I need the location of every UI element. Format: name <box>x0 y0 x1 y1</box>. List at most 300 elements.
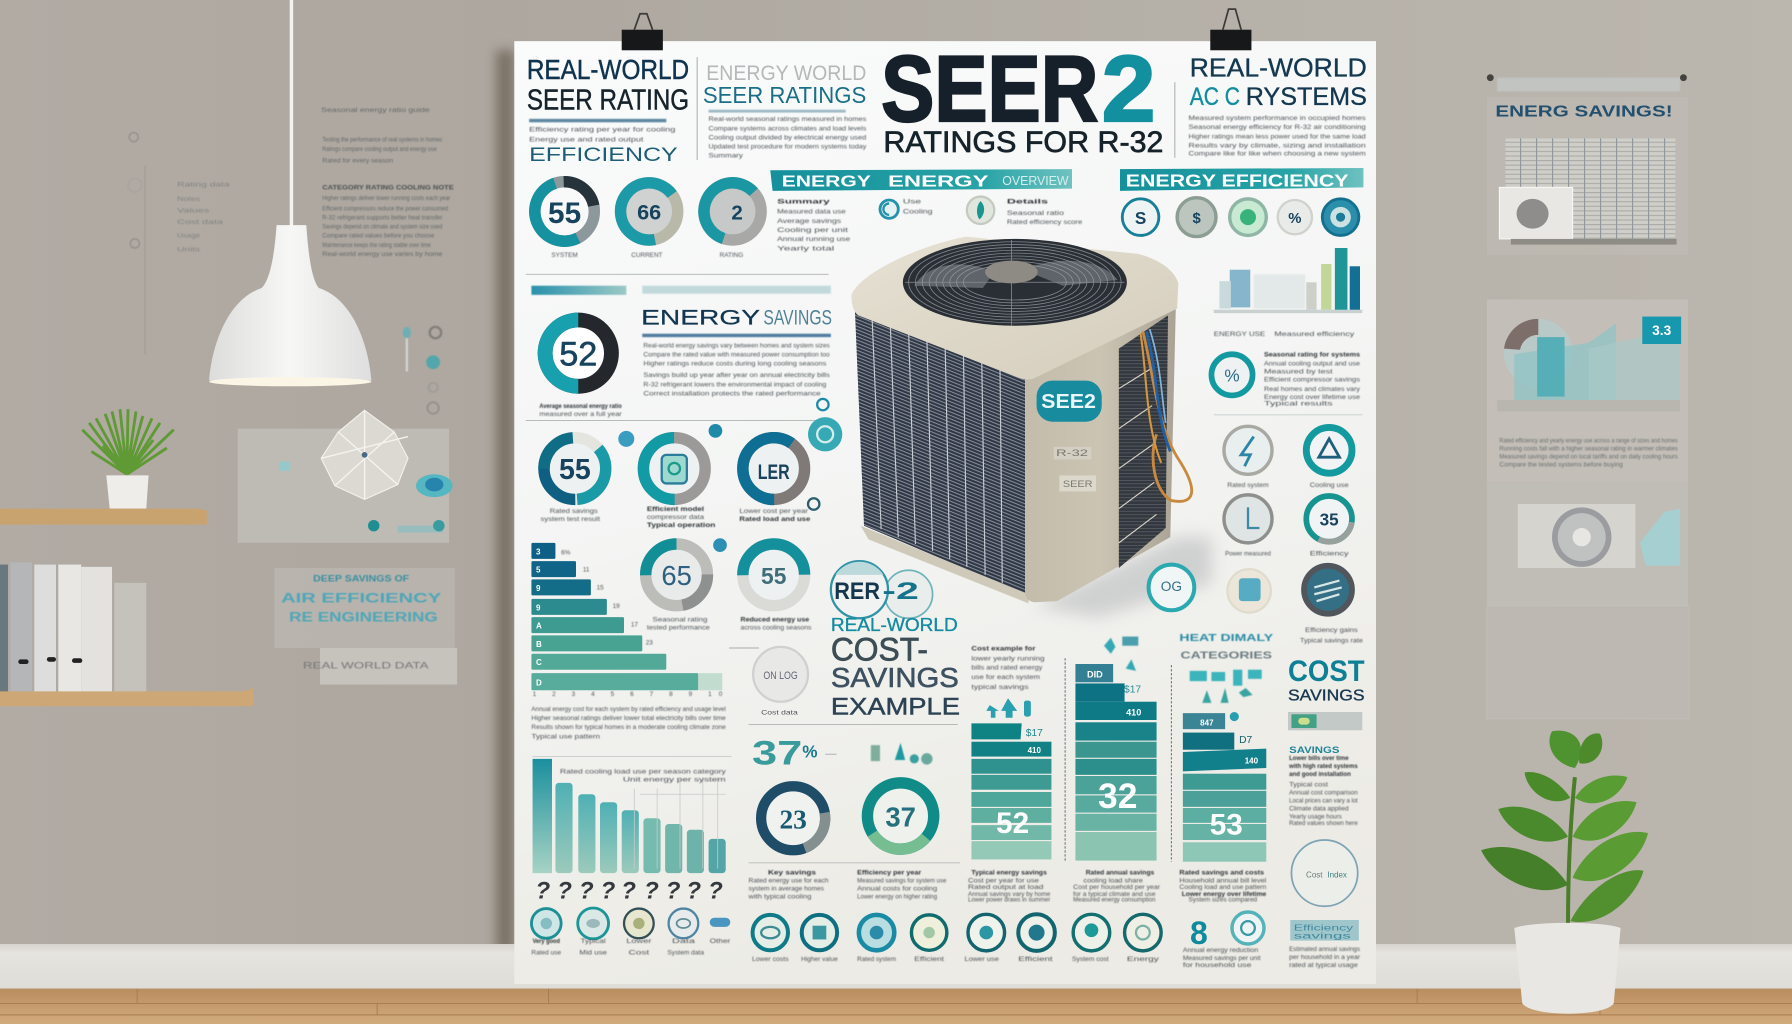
cost savings sidebar: COST <box>1288 655 1365 688</box>
ring row 3 <box>646 538 811 716</box>
horizontal bar chart: C <box>536 658 542 667</box>
left ghost text panel on wall: Higher ratings deliver lower running costs each year <box>322 195 451 202</box>
header column: SEER ratings: Compare systems across climates and load levels <box>709 125 866 132</box>
ring 23: 23 <box>779 805 807 835</box>
header column: SEER ratings <box>703 60 867 160</box>
question mark row: ? <box>536 877 551 904</box>
left ghost text panel on wall: Maintenance keeps the rating stable over time <box>322 242 431 249</box>
header column: real-world SEER rating: SEER RATING <box>527 85 689 117</box>
text under stacks: Lower energy over lifetime <box>1182 891 1267 898</box>
horizontal bar chart: 9 <box>536 584 541 593</box>
ghost panel: energy efficiency text: AIR EFFICIENCY <box>281 590 441 605</box>
cost savings sidebar <box>1288 655 1365 969</box>
text block <box>1214 331 1361 408</box>
icon captions: for household use <box>1183 962 1252 969</box>
energy savings section <box>526 274 832 421</box>
left ghost text panel on wall: Savings depend on climate and system size used <box>322 224 443 231</box>
ring teal percent <box>1211 354 1253 395</box>
left ghost text panel on wall: Testing the performance of real systems in homes <box>322 137 442 144</box>
icon captions: Efficient <box>914 956 944 963</box>
grey seal: Cost data <box>761 709 798 716</box>
caption columns: Lower energy on higher rating <box>857 893 938 900</box>
teal icons <box>1190 670 1262 703</box>
panel: wall charts: Measured savings depend on local tariffs and on daily cooling hours <box>1499 453 1678 460</box>
stacked bar column 1: $17 <box>1026 728 1043 739</box>
text under stacks: System sizes compared <box>1189 897 1258 904</box>
icon row bottom left: Lower <box>626 938 653 945</box>
left ghost text panel on wall: CATEGORY RATING COOLING NOTE <box>322 185 455 192</box>
question mark row: ? <box>708 877 723 904</box>
icon row bottom left: System data <box>667 949 704 956</box>
R-32 badge: -2 <box>882 578 919 605</box>
stacked bar column 3 <box>1183 712 1266 862</box>
stacked bar column 2 <box>1075 664 1157 861</box>
horizontal bar chart <box>531 543 726 740</box>
icon: leaf ring <box>967 197 994 224</box>
ring 55 teal: 55 <box>761 563 787 589</box>
icon row top right: % <box>1288 211 1301 227</box>
fan guard <box>903 239 1127 326</box>
horizontal bar chart: 19 <box>613 603 620 610</box>
savings paragraph: Savings build up year after year on annual electricity bills <box>643 372 830 379</box>
captions: Power measured <box>1225 550 1271 557</box>
faint far-left notes and rule <box>128 133 230 354</box>
horizontal bar chart: 17 <box>631 621 638 628</box>
captions: Reduced energy use <box>741 617 810 624</box>
ring 65 <box>646 544 707 606</box>
caption columns: Key savings <box>768 869 817 876</box>
binder clips <box>622 9 1251 50</box>
ghost icons beside lamp <box>403 327 441 414</box>
caption: measured over a full year <box>539 411 623 418</box>
upper shelf <box>0 509 207 525</box>
header column: real-world AC systems: REAL-WORLD <box>1190 53 1367 83</box>
blue tag <box>1290 920 1359 941</box>
icon captions: Lower costs <box>752 956 789 963</box>
ring 55 <box>531 425 618 512</box>
icon captions: Annual energy reduction <box>1183 947 1259 954</box>
ring 37: 37 <box>885 801 916 832</box>
ring captions: RATING <box>720 252 743 259</box>
text under stacks: Lower power draws in summer <box>968 897 1051 904</box>
text under stacks: Household annual bill level <box>1179 877 1266 884</box>
cost savings sidebar: Yearly usage hours <box>1289 813 1342 820</box>
icon captions: Rated system <box>857 956 896 963</box>
teal banner energy: OVERVIEW <box>1002 174 1069 188</box>
captions: Typical savings rate <box>1300 637 1363 644</box>
caption columns: with typical cooling <box>747 893 812 900</box>
caption <box>539 403 623 418</box>
captions: Typical operation <box>647 522 716 529</box>
text under stacks: Rated output at load <box>968 884 1044 891</box>
text under stacks: Cost per year for use <box>968 877 1039 884</box>
stacked bar column 1 header: lower yearly running <box>971 656 1045 663</box>
stacked bar column 2: $17 <box>1124 685 1141 696</box>
icon row top right: S <box>1135 208 1146 228</box>
faint far-left notes and rule: Rating data <box>177 181 230 188</box>
header column: SEER ratings: ENERGY WORLD <box>706 60 866 85</box>
text block: Annual cooling output and use <box>1264 361 1360 368</box>
mid banner notes and icons: Summary <box>777 198 830 205</box>
text under stacks: Annual savings vary by home <box>968 891 1051 898</box>
teal banner energy efficiency <box>1120 168 1363 191</box>
ring captions <box>551 252 743 259</box>
small building chart <box>1214 248 1362 313</box>
header column: real-world AC systems: Compare like for like when choosing a new system <box>1189 150 1366 157</box>
grille bars <box>872 315 1002 583</box>
header column: real-world SEER rating: REAL-WORLD <box>527 54 689 85</box>
panel: wall charts: Compare the tested systems before buying <box>1499 461 1623 468</box>
tag strip <box>531 286 626 295</box>
horizontal bar chart: 6% <box>561 549 571 556</box>
pale seal: Cost <box>1306 871 1323 880</box>
cost savings sidebar: Estimated annual savings <box>1289 946 1360 953</box>
header column: real-world AC systems: RYSTEMS <box>1246 83 1367 111</box>
header column: real-world AC systems: AC C <box>1190 83 1240 111</box>
ring teal percent: % <box>1224 366 1240 386</box>
ring icon <box>643 438 705 499</box>
horizontal bar chart: Higher seasonal ratings deliver lower total electricity bills over time <box>531 715 726 722</box>
icon row bottom left: Very good <box>533 938 560 945</box>
blue tag: savings <box>1294 931 1351 940</box>
header column: real-world SEER rating: Efficiency rating per year for cooling <box>529 126 676 133</box>
horizontal bar chart: 1 2 3 4 5 6 7 8 9 10 <box>533 691 723 698</box>
teal banner energy efficiency: ENERGY EFFICIENCY <box>1126 170 1349 190</box>
caption: Average seasonal energy ratio <box>539 403 622 410</box>
faint far-left notes and rule: Notes <box>177 196 200 203</box>
text block: Measured efficiency <box>1274 331 1355 338</box>
caption columns: Efficiency per year <box>857 869 922 876</box>
teal banner energy: ENERGY <box>888 173 989 190</box>
icon captions: Measured savings per unit <box>1183 955 1261 962</box>
dashed separators <box>1065 658 1171 862</box>
cost savings heading <box>831 614 960 720</box>
horizontal bar chart: Typical use pattern <box>531 733 601 740</box>
text under stacks: Rated annual savings <box>1086 869 1155 876</box>
header column: SEER ratings: SEER RATINGS <box>703 82 866 108</box>
vertical bar chart: Rated cooling load use per season category <box>560 769 727 776</box>
cost savings sidebar: and good installation <box>1289 771 1351 778</box>
percent block <box>747 725 960 963</box>
wooden floor <box>0 989 1792 1024</box>
text under stacks: for a typical climate and use <box>1073 891 1156 898</box>
ring LER: LER <box>758 459 790 484</box>
caption columns: system in average homes <box>749 885 824 892</box>
text block: Seasonal rating for systems <box>1264 352 1360 359</box>
stacked bar column 3 header: CATEGORIES <box>1181 650 1272 661</box>
faint far-left notes and rule: Usage <box>177 233 201 240</box>
stacked bar column 1 header: use for each system <box>971 674 1040 681</box>
caption columns <box>747 869 947 900</box>
title: RATINGS FOR R-32 <box>883 126 1163 159</box>
stacked bar column 2: 32 <box>1098 776 1137 816</box>
floor shadow on poster <box>1034 537 1211 617</box>
ring 37 <box>854 769 947 863</box>
wires <box>1141 329 1192 501</box>
left ghost text panel on wall: Real-world energy use varies by home <box>322 251 443 258</box>
text under stacks: Cost per household per year <box>1073 884 1161 891</box>
right side rating column: 35 <box>1320 510 1339 530</box>
text under stacks: Cooling load and use pattern <box>1179 884 1267 891</box>
captions: system test result <box>541 516 600 523</box>
captions: Efficient model <box>647 506 704 513</box>
header column: real-world AC systems: Measured system performance in occupied homes <box>1189 115 1366 122</box>
percent block: 37 <box>752 735 802 773</box>
question mark row: ? <box>579 877 594 904</box>
ghost panel with umbrella diagram <box>238 410 453 543</box>
side labels: R-32 <box>1056 448 1088 458</box>
ring 52: 52 <box>559 336 597 374</box>
pale seal: Index <box>1327 871 1347 880</box>
lower shelf <box>0 688 254 706</box>
left ghost text panel on wall: Rated for every season <box>322 157 394 164</box>
savings paragraph: Real-world energy savings vary between homes and system sizes <box>643 342 830 349</box>
baseboard <box>0 944 1792 990</box>
cost savings sidebar: SAVINGS <box>1288 688 1365 705</box>
left ghost text panel on wall: Efficient compressors reduce the power consumed <box>322 205 448 212</box>
teal house icons <box>1104 637 1138 671</box>
cost savings sidebar: rated at typical usage <box>1289 962 1358 969</box>
header column: real-world SEER rating <box>527 54 689 166</box>
side grille <box>1119 315 1168 568</box>
savings paragraph <box>643 342 830 397</box>
grey seal <box>729 647 808 716</box>
captions: Rated load and use <box>739 516 811 523</box>
small icons <box>618 399 842 510</box>
pale seal <box>1291 840 1358 906</box>
icon row bottom left: Data <box>672 938 696 945</box>
ghost panel: energy efficiency text: DEEP SAVINGS OF <box>313 574 410 584</box>
ring 2: 2 <box>731 201 743 224</box>
icon row <box>753 915 947 950</box>
title: SEER <box>881 36 1098 141</box>
question mark row: ? <box>644 877 659 904</box>
mid banner notes and icons: Cooling per unit <box>777 227 848 234</box>
ring 55: 55 <box>548 197 581 230</box>
text under stacks: cooling load share <box>1083 877 1143 884</box>
stacked bar column 1 header: Cost example for <box>971 645 1036 652</box>
icon row under stacks: 8 <box>1190 915 1208 951</box>
ring 55: 55 <box>559 454 591 486</box>
icon row bottom left: Typical <box>581 938 606 945</box>
icon captions: Energy <box>1127 956 1160 963</box>
percent block: % <box>802 742 818 762</box>
left ghost text panel on wall <box>321 107 455 258</box>
left ghost text panel on wall: Ratings compare cooling output and energy use <box>322 146 437 153</box>
captions <box>541 506 811 529</box>
horizontal bar chart: A <box>536 622 542 631</box>
faint far-left notes and rule: Cost data <box>177 219 224 226</box>
question mark row: ? <box>686 877 701 904</box>
stacked bar column 1: 52 <box>996 807 1029 840</box>
ring captions: SYSTEM <box>551 252 578 259</box>
icon captions <box>752 956 944 963</box>
cost savings heading: SAVINGS <box>831 662 959 693</box>
R-32 badge <box>831 561 933 618</box>
ghost panel: energy efficiency text <box>274 568 457 685</box>
text under stacks <box>968 869 1267 904</box>
stacked bar column 3 header: HEAT DIMALY <box>1179 633 1274 644</box>
heading energy savings: ENERGY <box>641 305 760 330</box>
captions: Efficiency <box>1310 550 1350 557</box>
ring 2 <box>696 175 769 248</box>
savings paragraph: Compare the rated value with measured power consumption too <box>643 352 830 359</box>
icon row top right: $ <box>1192 211 1201 227</box>
ghost panel: energy efficiency text: REAL WORLD DATA <box>303 661 430 671</box>
captions <box>647 617 811 632</box>
right face <box>1025 299 1176 602</box>
stacked bar column 1: 410 <box>1028 746 1042 755</box>
ring LER <box>743 438 805 499</box>
icon rings <box>1224 426 1272 474</box>
horizontal bar chart: Results shown for typical homes in a moderate cooling climate zone <box>531 724 726 731</box>
captions: Lower cost per year <box>739 508 809 515</box>
icon row top right <box>1122 198 1359 237</box>
captions: compressor data <box>647 514 705 521</box>
captions: Cooling use <box>1310 482 1349 489</box>
horizontal bar chart: 23 <box>646 640 653 647</box>
icon captions: System cost <box>1072 956 1109 963</box>
horizontal bar chart: Annual energy cost for each system by rated efficiency and usage level <box>531 706 726 713</box>
panel: energy savings unit <box>1487 74 1688 255</box>
cost savings sidebar: Typical cost <box>1289 781 1328 788</box>
icon row bottom left: Cost <box>629 949 649 956</box>
mid banner notes and icons: Details <box>1007 198 1049 205</box>
question mark row: ? <box>601 877 616 904</box>
cost savings sidebar: with high rated systems <box>1288 763 1358 770</box>
panel: wall charts: Rated efficiency and yearly energy use across a range of sizes and homes <box>1499 437 1678 444</box>
ring 23 <box>756 781 830 855</box>
mid banner notes and icons: Cooling <box>903 209 933 216</box>
cost savings sidebar: Local prices can vary a lot <box>1289 797 1358 804</box>
horizontal bar chart: 15 <box>597 585 604 592</box>
cost savings heading: COST- <box>831 632 928 668</box>
mid banner notes and icons: Yearly total <box>777 245 834 252</box>
panel: wall charts: 3.3 <box>1652 323 1672 338</box>
caption columns: Rated energy use for each <box>749 877 829 884</box>
small icon <box>713 538 727 552</box>
panel: empty sheet <box>1487 606 1689 719</box>
AC unit <box>851 237 1211 617</box>
icon row under stacks <box>968 912 1264 951</box>
ring 55 teal <box>743 544 805 606</box>
panel: energy savings unit: ENERG SAVINGS! <box>1495 104 1673 121</box>
text block: Real homes and climates vary <box>1264 386 1361 393</box>
teal banner energy <box>770 169 1072 191</box>
ghost panel: energy efficiency text: RE ENGINEERING <box>289 610 438 625</box>
captions: across cooling seasons <box>741 625 811 632</box>
icon captions: Higher value <box>801 956 838 963</box>
R-32 badge: RER <box>834 578 880 605</box>
stacked bar column 3 header <box>1179 633 1274 661</box>
lid <box>851 237 1178 380</box>
question mark row: ? <box>621 877 636 904</box>
ring 52 <box>545 320 611 386</box>
savings paragraph: R-32 refrigerant lowers the environmental impact of cooling <box>643 381 827 388</box>
side labels: SEER <box>1063 479 1093 489</box>
mid banner notes and icons: Rated efficiency score <box>1007 219 1083 226</box>
header column: real-world SEER rating: Energy use and rated output <box>529 137 644 144</box>
left ghost text panel on wall: R-32 refrigerant supports better heat transfer <box>322 214 443 221</box>
caption columns: Annual costs for cooling <box>857 885 938 892</box>
cost savings sidebar: Lower bills over time <box>1289 755 1349 762</box>
savings paragraph: Higher ratings reduce costs during long cooling seasons <box>643 361 826 368</box>
faint far-left notes and rule: Units <box>177 246 200 253</box>
header column: real-world AC systems: Results vary by climate, sizing and installation <box>1189 142 1366 149</box>
stacked bar column 1 header: typical savings <box>971 684 1029 691</box>
stacked bar column 3: 140 <box>1245 756 1259 765</box>
text block: Typical results <box>1264 401 1333 408</box>
icon row bottom left: Rated use <box>531 949 562 956</box>
stacked bar column 1 header: bills and rated energy <box>971 665 1043 672</box>
panel: wall charts: Running costs fall with a higher seasonal rating in warmer climates <box>1499 445 1678 452</box>
mid banner notes and icons: Average savings <box>777 218 841 225</box>
mid banner notes and icons: Measured data use <box>777 209 846 216</box>
right corner plant <box>1481 731 1648 1014</box>
header column: real-world AC systems: Seasonal energy efficiency for R-32 air conditioning <box>1189 124 1366 131</box>
captions: Rated system <box>1227 482 1269 489</box>
captions <box>1225 482 1363 644</box>
header column: SEER ratings: Summary <box>709 153 744 160</box>
cost savings sidebar: Climate data applied <box>1289 805 1349 812</box>
pendant lamp <box>209 0 371 386</box>
side labels <box>1054 447 1096 491</box>
icon captions: Lower use <box>965 956 999 963</box>
captions: Seasonal rating <box>653 617 708 624</box>
ring row 2 <box>531 399 842 529</box>
icon strip <box>1288 712 1362 730</box>
captions: tested performance <box>647 625 710 632</box>
header column: SEER ratings: Cooling output divided by electrical energy used <box>709 134 867 141</box>
panel: wall charts <box>1487 299 1688 482</box>
cost savings heading: EXAMPLE <box>831 693 960 720</box>
panel: outdoor unit <box>1487 482 1688 606</box>
horizontal bar chart: 11 <box>583 566 590 573</box>
ring captions: CURRENT <box>631 252 663 259</box>
question mark row <box>536 877 723 904</box>
savings paragraph: Correct installation protects the rated performance <box>643 390 821 397</box>
icon row bottom left: Mid use <box>579 949 607 956</box>
cost savings sidebar: per household in a year <box>1289 954 1361 961</box>
horizontal bar chart: 5 <box>536 566 541 575</box>
left ghost text panel on wall: Seasonal energy ratio guide <box>321 107 430 114</box>
right side rating column <box>1149 331 1363 644</box>
question mark row: ? <box>666 877 681 904</box>
mid banner notes and icons <box>777 197 1083 252</box>
SEER2 badge <box>1037 381 1102 422</box>
right side rating column: OG <box>1161 579 1182 594</box>
stacked bar column 2: DID <box>1087 670 1103 680</box>
right wall panels <box>1487 74 1689 719</box>
captions: Efficiency gains <box>1305 627 1358 634</box>
upper shelf plant <box>82 409 174 509</box>
text under stacks: Typical energy savings <box>971 869 1047 876</box>
text under stacks: Measured energy consumption <box>1073 897 1156 904</box>
heading energy savings <box>641 305 832 330</box>
vertical bar chart <box>533 757 731 904</box>
horizontal bar chart: 3 <box>536 547 541 556</box>
divider <box>697 57 1175 160</box>
stacked bar column 2: 410 <box>1126 707 1141 717</box>
horizontal bar chart: 9 <box>536 603 541 612</box>
header column: real-world AC systems <box>1189 53 1367 157</box>
horizontal bar chart: D <box>536 679 542 688</box>
caption columns: Measured savings for system use <box>857 877 947 884</box>
text under stacks: Rated savings and costs <box>1179 869 1265 876</box>
icon captions: Efficient <box>1018 956 1053 963</box>
captions: Rated savings <box>550 508 598 515</box>
text block: ENERGY USE <box>1214 331 1265 338</box>
